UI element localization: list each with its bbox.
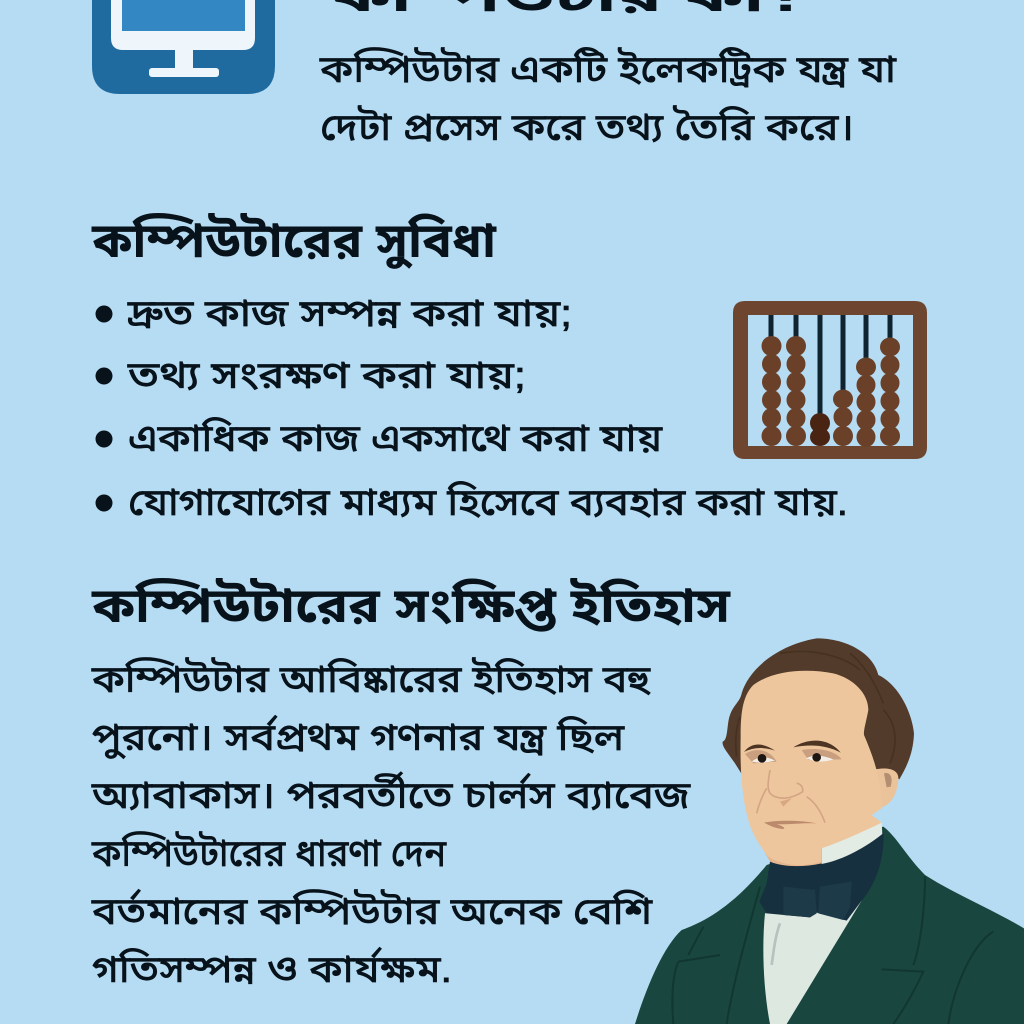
ear bbox=[875, 768, 898, 808]
face bbox=[741, 671, 882, 865]
history text: অ্যাবাকাস। পরবর্তীতে চার্লস ব্যাবেজ bbox=[91, 771, 691, 817]
history text: বর্তমানের কম্পিউটার অনেক বেশি bbox=[91, 888, 653, 933]
heading: advantages: কম্পিউটারের সুবিধা bbox=[91, 213, 497, 269]
collar bbox=[822, 822, 882, 864]
eyebrows bbox=[744, 744, 775, 752]
intro text: কম্পিউটার একটি ইলেকট্রিক যন্ত্র যা bbox=[319, 47, 897, 91]
advantages list: দ্রুত কাজ সম্পন্ন করা যায়; bbox=[127, 293, 572, 335]
cravat bbox=[759, 832, 884, 921]
eyes bbox=[758, 754, 766, 763]
icon: abacus bbox=[733, 301, 927, 459]
advantages list: তথ্য সংরক্ষণ করা যায়; bbox=[127, 355, 526, 397]
hair bbox=[723, 638, 914, 779]
history text bbox=[91, 657, 691, 991]
history text: কম্পিউটার আবিষ্কারের ইতিহাস বহু bbox=[91, 657, 651, 701]
shirt bbox=[763, 901, 862, 1024]
coat lines bbox=[672, 877, 993, 1024]
portrait: Charles Babbage bbox=[635, 638, 1024, 1024]
intro text bbox=[319, 47, 897, 149]
advantages list bbox=[96, 293, 848, 524]
history text: পুরনো। সর্বপ্রথম গণনার যন্ত্র ছিল bbox=[92, 714, 625, 759]
history text: গতিসম্পন্ন ও কার্যক্ষম. bbox=[92, 946, 452, 991]
icon: computer monitor bbox=[92, 0, 275, 94]
intro text: দেটা প্রসেস করে তথ্য তৈরি করে। bbox=[320, 105, 854, 149]
advantages list: যোগাযোগের মাধ্যম হিসেবে ব্যবহার করা যায়. bbox=[128, 480, 848, 524]
heading: history: কম্পিউটারের সংক্ষিপ্ত ইতিহাস bbox=[91, 578, 731, 633]
nose and lines bbox=[757, 770, 825, 823]
history text: কম্পিউটারের ধারণা দেন bbox=[91, 831, 447, 875]
neck bbox=[763, 843, 822, 866]
advantages list: একাধিক কাজ একসাথে করা যায় bbox=[128, 416, 663, 460]
mouth bbox=[764, 821, 817, 829]
eye whites bbox=[752, 756, 833, 763]
eye shadow bbox=[745, 749, 842, 763]
coat bbox=[635, 827, 1024, 1024]
